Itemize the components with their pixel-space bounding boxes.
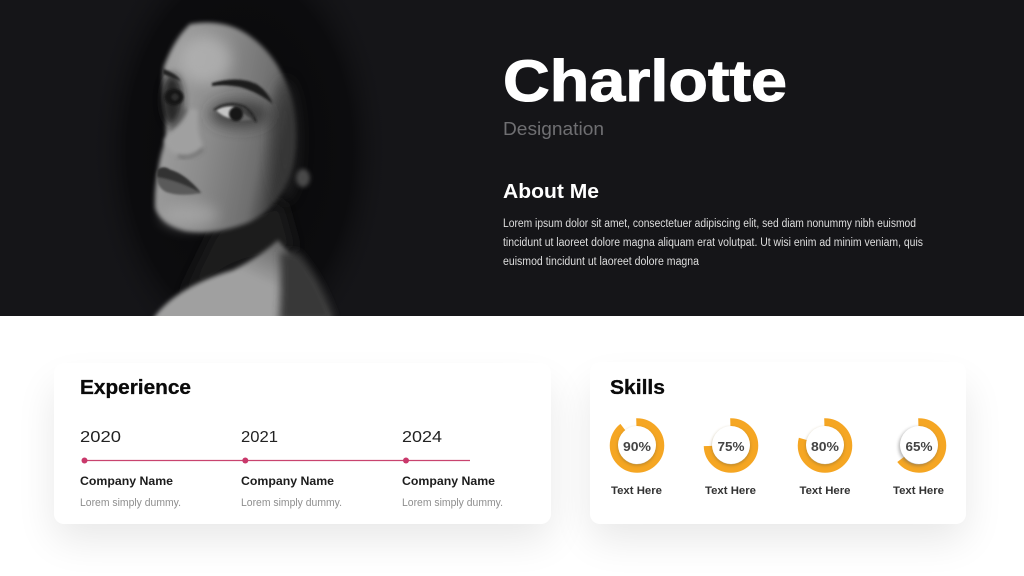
entry 2021: Company Name: [241, 474, 334, 488]
skill ring 90%: 90%: [623, 439, 651, 454]
entry 2024: 2024: [402, 429, 442, 446]
entry 2020: Lorem simply dummy.: [80, 497, 181, 509]
entry 2021: 2021: [241, 429, 278, 446]
entry 2020: 2020: [80, 429, 121, 446]
about me heading: About Me: [503, 181, 599, 203]
about me paragraph: [503, 218, 923, 268]
designation: Designation: [503, 119, 604, 139]
skill ring 80%: Text Here: [800, 485, 850, 497]
experience heading: Experience: [80, 377, 191, 399]
entry 2020: Company Name: [80, 474, 173, 488]
skills heading: Skills: [610, 377, 665, 399]
panel: skills: [590, 362, 966, 540]
portrait photo: [124, 0, 356, 316]
title: Charlotte: [503, 49, 787, 114]
entry 2024: Company Name: [402, 474, 495, 488]
skill ring 80%: 80%: [811, 439, 839, 454]
skill ring 75%: 75%: [718, 439, 745, 454]
about me paragraph: euismod tincidunt ut laoreet dolore magna: [503, 256, 700, 268]
entry 2024: [402, 429, 503, 509]
skill ring 75%: [705, 422, 756, 497]
skill ring 90%: Text Here: [611, 485, 662, 497]
entry 2021: Lorem simply dummy.: [241, 497, 342, 509]
skill ring 80%: [800, 422, 850, 497]
panel: experience: [54, 363, 551, 540]
skill ring 65%: Text Here: [893, 485, 944, 497]
entry 2020: [80, 429, 181, 509]
skill ring 65%: [893, 422, 944, 497]
skill ring 75%: Text Here: [705, 485, 756, 497]
entry 2021: [241, 429, 342, 509]
about me paragraph: tincidunt ut laoreet dolore magna aliquam erat volutpat. Ut wisi enim ad minim veniam, quis: [503, 237, 923, 249]
skill ring 65%: 65%: [906, 439, 933, 454]
hero banner background: [0, 0, 1024, 316]
skill ring 90%: [611, 422, 662, 497]
timeline: [82, 458, 470, 464]
about me paragraph: Lorem ipsum dolor sit amet, consectetuer adipiscing elit, sed diam nonummy nibh euismod: [503, 218, 916, 230]
entry 2024: Lorem simply dummy.: [402, 497, 503, 509]
